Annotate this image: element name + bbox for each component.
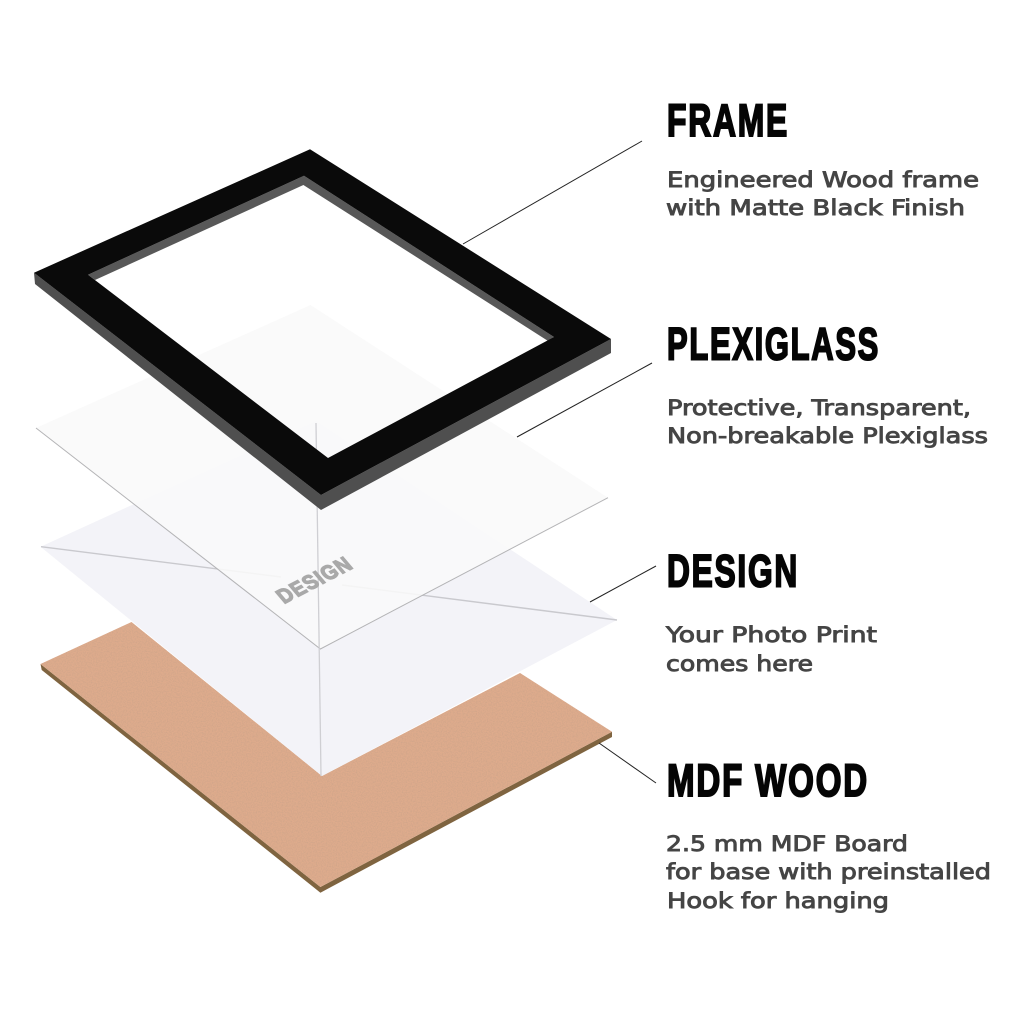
fold line: right bbox=[342, 585, 617, 620]
plexiglass sheet bbox=[36, 305, 608, 649]
connector line: MDF bbox=[599, 743, 656, 783]
connector line: frame bbox=[463, 141, 642, 244]
vertical centre line bbox=[316, 423, 321, 776]
description: frame: Engineered Wood frame bbox=[667, 168, 979, 193]
design print sheet bbox=[40, 421, 617, 776]
fold line: left bbox=[41, 547, 281, 577]
heading: design: DESIGN bbox=[667, 546, 799, 596]
description: design: comes here bbox=[666, 652, 813, 677]
description: plexiglass: Non-breakable Plexiglass bbox=[667, 424, 988, 449]
frame inner wall bbox=[88, 176, 554, 341]
connector line: plexiglass bbox=[517, 363, 652, 437]
frame outer side bbox=[34, 273, 611, 510]
description: MDF wood: Hook for hanging bbox=[667, 889, 889, 914]
description: design: Your Photo Print bbox=[665, 623, 877, 648]
black frame bbox=[34, 149, 611, 510]
description: plexiglass bbox=[667, 396, 988, 449]
heading: MDF wood: MDF WOOD bbox=[667, 755, 869, 806]
description: MDF wood bbox=[666, 832, 991, 914]
description: frame bbox=[666, 168, 979, 221]
heading: frame: FRAME bbox=[667, 95, 789, 146]
frame top face bbox=[34, 149, 611, 495]
heading: plexiglass: PLEXIGLASS bbox=[667, 318, 880, 370]
description: MDF wood: 2.5 mm MDF Board bbox=[666, 832, 908, 857]
description: MDF wood: for base with preinstalled bbox=[666, 860, 991, 885]
MDF wood board bbox=[40, 622, 612, 893]
connector line: design bbox=[590, 566, 656, 602]
description: design bbox=[665, 623, 877, 677]
description: plexiglass: Protective, Transparent, bbox=[667, 396, 971, 421]
description: frame: with Matte Black Finish bbox=[666, 196, 965, 221]
design watermark label: DESIGN bbox=[271, 552, 358, 608]
